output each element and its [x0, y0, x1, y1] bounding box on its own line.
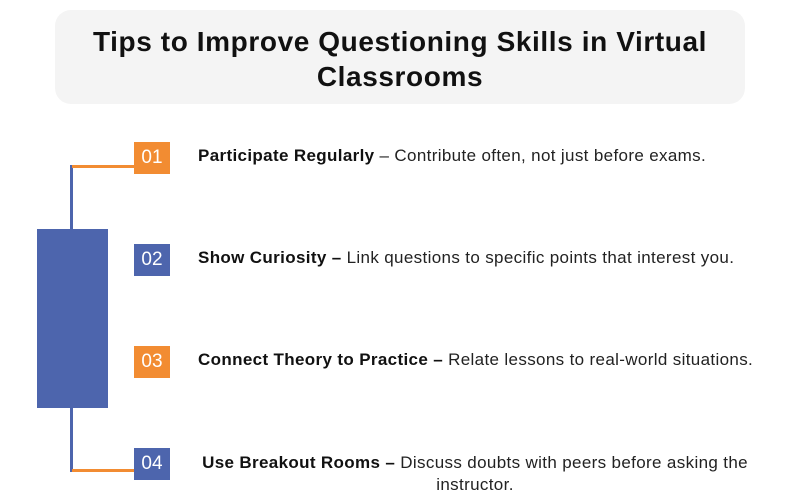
central block [37, 229, 108, 408]
top orange connector [72, 165, 134, 168]
bottom orange connector [72, 469, 134, 472]
badge 01 [134, 142, 170, 174]
badge 02 [134, 244, 170, 276]
badge 04: 04 [141, 453, 163, 474]
tip 4: Use Breakout Rooms – Discuss doubts with peers before asking the [202, 453, 748, 472]
connector diagram [37, 165, 134, 472]
title: Tips to Improve Questioning Skills in Virtual [93, 26, 707, 57]
title: Classrooms [317, 61, 483, 92]
badge 02: 02 [141, 249, 163, 270]
tip 2: Show Curiosity – Link questions to specific points that interest you. [198, 248, 734, 267]
title [55, 10, 745, 104]
tip 4 [202, 453, 748, 494]
badge 03 [134, 346, 170, 378]
tip 1: Participate Regularly – Contribute often, not just before exams. [198, 146, 706, 165]
badge 01: 01 [141, 147, 163, 168]
badge 03: 03 [141, 351, 163, 372]
badge 04 [134, 448, 170, 480]
tip 3: Connect Theory to Practice – Relate lessons to real-world situations. [198, 350, 753, 369]
tip 4: instructor. [436, 475, 514, 494]
vertical line [70, 165, 73, 472]
